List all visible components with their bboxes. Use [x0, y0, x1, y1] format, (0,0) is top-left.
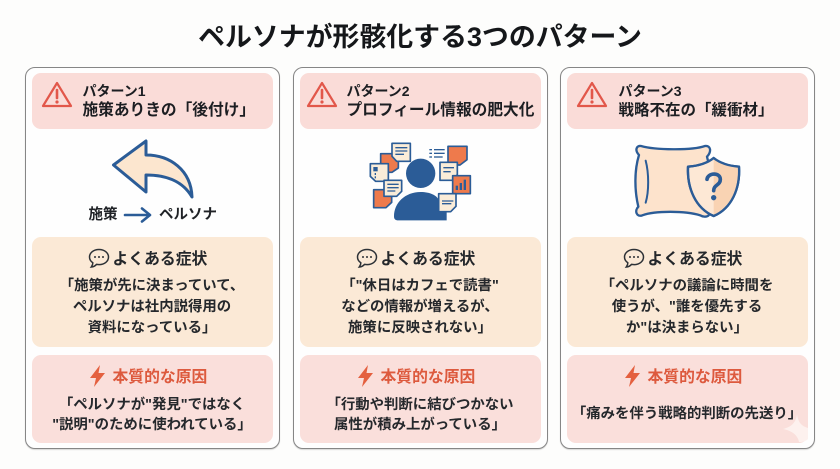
panel: pattern 1 [25, 67, 280, 449]
quote: 「施策が先に決まっていて、 [60, 278, 244, 294]
header: pattern 1 [32, 72, 272, 128]
icon: lightning [358, 365, 373, 387]
header: pattern 3 [566, 72, 808, 128]
label: 施策: 施策 [88, 207, 118, 223]
quote: 「痛みを伴う戦略的判断の先送り」 [572, 406, 802, 422]
quote: ペルソナは社内説得用の [73, 298, 231, 314]
icon: lightning [625, 365, 640, 387]
icon: warning triangle [576, 82, 608, 108]
panel: common symptoms [566, 236, 808, 346]
heading: よくある症状 [112, 250, 207, 268]
icon: warning triangle [306, 82, 338, 108]
pattern number: パターン3 [618, 82, 682, 98]
quote: か"は決まらない」 [626, 320, 748, 336]
panel: pattern 2 [293, 67, 548, 449]
panel: common symptoms [300, 236, 540, 346]
pattern name: プロフィール情報の肥大化 [346, 102, 534, 118]
icon: persona surrounded by documents [370, 142, 472, 220]
quote [326, 396, 514, 432]
quote: 「ペルソナの議論に時間を [601, 278, 773, 294]
quote: などの情報が増えるが、 [341, 298, 499, 314]
arrow: 施策 to ペルソナ [124, 207, 152, 223]
quote: 施策に反映されない」 [348, 320, 492, 336]
heading: よくある症状 [648, 250, 742, 268]
quote: 使うが、"誰を優先する [612, 298, 762, 314]
icon: speech bubble [88, 248, 110, 268]
quote: "説明"のために使われている」 [52, 416, 252, 432]
quote: 「"休日はカフェで読書" [341, 278, 499, 294]
quote [52, 396, 252, 432]
icon: speech bubble [624, 248, 644, 268]
quote: 「ペルソナが"発見"ではなく [59, 396, 245, 412]
heading: 本質的な原因 [112, 368, 207, 386]
quote: 「行動や判断に結びつかない [326, 396, 514, 412]
quote: 資料になっている」 [88, 320, 216, 336]
pattern name: 施策ありきの「後付け」 [82, 102, 255, 118]
panel: root cause [32, 354, 272, 442]
title: ペルソナが形骸化する3つのパターン [198, 22, 642, 52]
icon: lightning [90, 365, 105, 387]
watermark sparkle [784, 416, 808, 442]
heading: 本質的な原因 [648, 368, 742, 386]
heading: 本質的な原因 [380, 368, 475, 386]
panel: common symptoms [32, 236, 272, 346]
panel: pattern 3 [560, 67, 815, 449]
icon: pillow and shield [634, 144, 740, 218]
pattern number: パターン2 [346, 82, 410, 98]
label: ペルソナ: ペルソナ [159, 207, 217, 223]
pattern name: 戦略不在の「緩衝材」 [618, 102, 774, 118]
icon: warning triangle [42, 82, 72, 108]
heading: よくある症状 [380, 250, 475, 268]
pattern number: パターン1 [82, 82, 146, 98]
panel: root cause [300, 354, 540, 442]
panel: root cause [566, 354, 808, 442]
icon: speech bubble [356, 248, 378, 268]
quote [341, 278, 499, 336]
quote: 属性が積み上がっている」 [334, 416, 506, 432]
header: pattern 2 [300, 72, 540, 128]
quote [601, 278, 773, 336]
quote [60, 278, 244, 336]
icon: return arrow [112, 139, 194, 198]
